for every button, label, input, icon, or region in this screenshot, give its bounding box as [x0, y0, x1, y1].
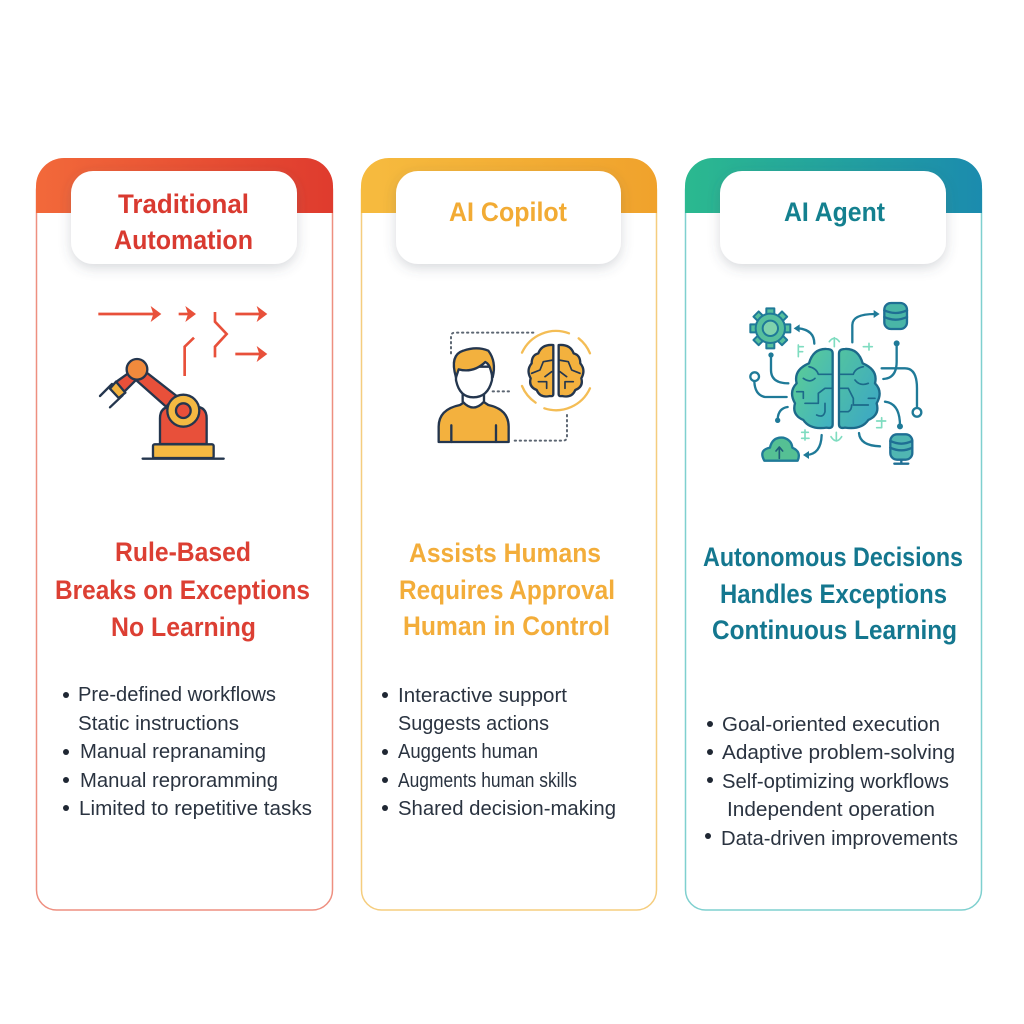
- bullet list: Self-optimizing workflows: [722, 771, 949, 793]
- bullet list: Independent operation: [727, 799, 935, 821]
- summary text: Autonomous Decisions: [703, 542, 963, 572]
- card outline: [686, 170, 982, 910]
- brain: [792, 349, 880, 428]
- icon: connected brain: [750, 303, 921, 464]
- summary text: [399, 538, 615, 641]
- small glyphs: [798, 338, 886, 441]
- bullet list: Static instructions: [78, 713, 239, 735]
- title pill: Traditional: [118, 189, 249, 219]
- card outline: [362, 170, 656, 910]
- card outline: [36, 170, 332, 910]
- icon: robot arm with arrows: [98, 306, 267, 459]
- summary text: Rule-Based: [115, 537, 251, 567]
- bullet list: [705, 714, 958, 850]
- bullet list: Auggents human: [398, 741, 538, 763]
- bullet list: Suggests actions: [398, 713, 549, 735]
- bullet list: Limited to repetitive tasks: [79, 798, 312, 820]
- bullet list: Pre-defined workflows: [78, 684, 276, 706]
- summary text: Breaks on Exceptions: [55, 575, 310, 605]
- header band: [36, 158, 333, 213]
- summary text: Continuous Learning: [712, 615, 957, 645]
- panel: AI Copilot: [361, 158, 657, 910]
- summary text: [703, 542, 963, 645]
- bullet list: Interactive support: [398, 685, 567, 707]
- title pill: Automation: [114, 225, 253, 255]
- bullet list: Goal-oriented execution: [722, 714, 940, 736]
- cloud: [762, 438, 799, 461]
- gear: [750, 308, 790, 348]
- summary text: Handles Exceptions: [720, 579, 947, 609]
- panel: AI Agent: [685, 158, 982, 910]
- header band: [361, 158, 657, 213]
- bullet list: Manual reproramming: [80, 770, 278, 792]
- bullet list: [382, 685, 616, 820]
- panel: Traditional Automation: [36, 158, 333, 910]
- summary text: [55, 537, 310, 642]
- title pill: AI Copilot: [449, 197, 567, 227]
- bullet list: Shared decision-making: [398, 798, 616, 820]
- bullet list: Adaptive problem-solving: [722, 742, 955, 764]
- summary text: Human in Control: [403, 611, 610, 641]
- summary text: No Learning: [111, 612, 256, 642]
- title pill: [71, 171, 297, 264]
- databases: [884, 303, 912, 464]
- summary text: Assists Humans: [409, 538, 601, 568]
- title pill: [396, 171, 621, 264]
- bullet list: Augments human skills: [398, 770, 577, 792]
- icon: person and brain: [439, 331, 590, 442]
- bullet list: Data-driven improvements: [721, 828, 958, 850]
- title pill: AI Agent: [784, 197, 885, 227]
- header band: [685, 158, 982, 213]
- title pill: [720, 171, 946, 264]
- bullet list: [63, 684, 312, 820]
- bullet list: Manual repranaming: [80, 741, 266, 763]
- summary text: Requires Approval: [399, 575, 615, 605]
